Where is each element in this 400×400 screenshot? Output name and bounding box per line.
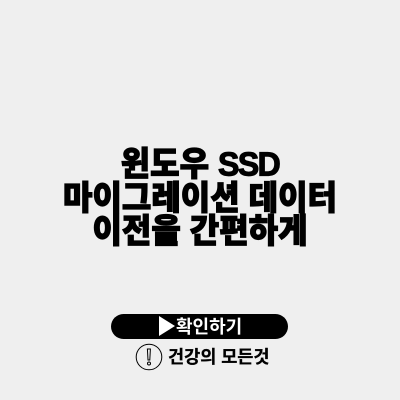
icon: exclamation circle — [136, 344, 162, 370]
button: confirm — [111, 314, 288, 339]
brand text: 건강의 모든것 — [168, 344, 270, 369]
title: 마이그레이션 데이터 — [63, 172, 337, 220]
title: 이전을 간편하게 — [92, 205, 308, 253]
icon: play triangle — [159, 316, 175, 336]
title — [63, 138, 337, 253]
title: 윈도우 SSD — [121, 138, 279, 186]
button label: 확인하기 — [176, 313, 242, 339]
